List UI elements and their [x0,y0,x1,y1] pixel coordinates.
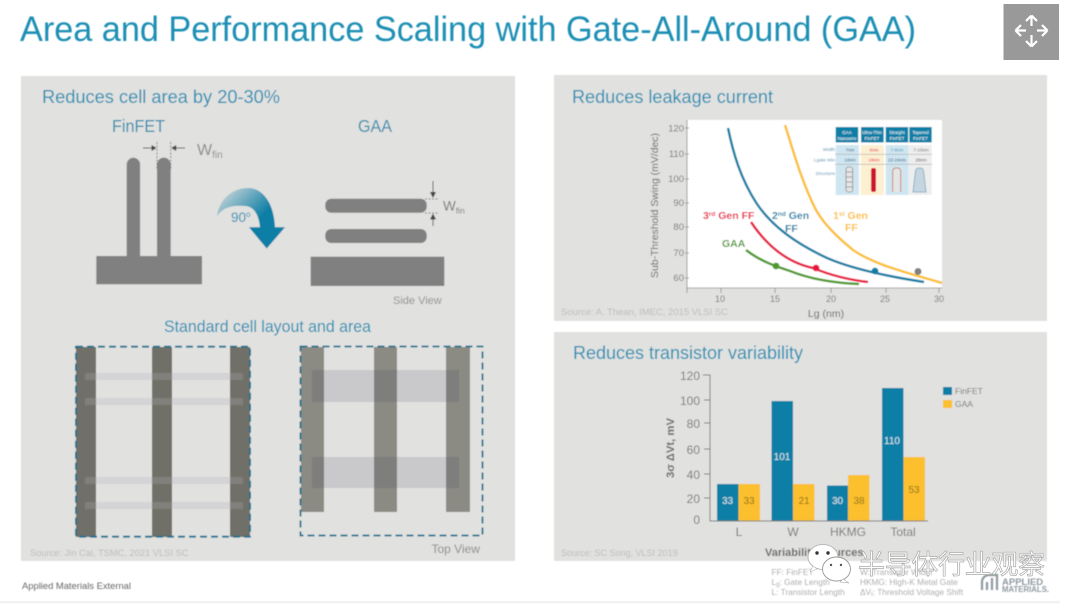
line chart: sub-threshold swing: 15 [770,294,780,304]
legend: FinFET [955,386,983,396]
logo: Applied Materials: APPLIED [1002,577,1043,588]
bar chart: 3 sigma delta Vt: W [787,525,799,539]
bar chart: 3 sigma delta Vt: 40 [687,468,700,482]
axis title: Lg: Lg (nm) [808,308,844,320]
curve label: 3rd Gen FF: 3 [703,210,709,222]
source: left panel: Source: Jin Cai, TSMC, 2021 VLSI SC [30,548,189,558]
line chart: sub-threshold swing: 20 [826,294,836,304]
axis title: delta Vt: 3σ ΔVt, mV [665,417,677,478]
glossary notes [772,567,964,598]
inset table: device structures: FinFET [890,136,905,141]
inset table: device structures: Tapered [912,130,929,135]
caption: side view: Side View [393,295,442,307]
line chart: sub-threshold swing: 10 [715,294,725,304]
footer rule [0,602,1060,603]
diagram: FinFET side view: fin [212,150,223,161]
legend [943,386,983,409]
diagram: GAA side view: fin [456,206,465,216]
line chart: sub-threshold swing: 100 [668,174,684,185]
glossary notes: L [772,577,776,587]
inset table: device structures: FinFET [913,136,928,141]
inset table: device structures: 22-24nm [888,158,906,162]
source: leakage: Source: A. Thean, IMEC, 2015 VLSI SC [561,307,729,317]
axis title: swing: Sub-Threshold Swing (mV/dec) [650,133,661,278]
glossary notes: HKMG: High-K Metal Gate [860,577,958,587]
watermark: text: 半导体行业观察 [858,543,1045,582]
inset table: device structures [814,127,932,195]
glossary notes: : Threshold Voltage Shift [873,587,964,597]
legend: GAA [955,399,973,409]
title: Area and Performance Scaling with Gate-All-Around (GAA) [20,9,916,49]
curve: 2nd Gen FF [728,128,924,282]
inset table: device structures: 6nm [870,148,879,152]
bar chart: 3 sigma delta Vt: 120 [680,369,700,383]
footer: classification: Applied Materials External [22,581,131,591]
curve label: 1st Gen FF: st [839,211,845,218]
source: variability: Source: SC Song, VLSI 2019 [561,548,678,558]
heading: leakage: Reduces leakage current [572,87,773,107]
line chart: sub-threshold swing: 90 [673,198,684,209]
diagram: GAA side view [311,181,465,286]
glossary notes: g [776,582,779,588]
glossary notes: L: Transistor Length [772,587,845,597]
curve label: 1st Gen FF: FF [845,222,858,234]
diagram: FinFET side view [96,142,223,284]
bar chart: 3 sigma delta Vt: 0 [693,513,700,527]
glossary notes: W: Transistor Width [860,567,933,577]
inset table: device structures: 7nm [846,148,855,152]
bar chart: 3 sigma delta Vt: 53 [908,485,920,496]
curve label: 2nd Gen FF: nd [778,211,786,218]
bar chart: 3 sigma delta Vt: 21 [798,496,810,507]
curve: GAA [746,250,859,284]
curve label: 1st Gen FF: Gen [845,210,868,222]
arrow: 90 degree rotation [217,188,285,248]
heading: cell area: Reduces cell area by 20-30% [42,87,280,107]
glossary notes: t [871,592,873,598]
label: FinFET: FinFET [112,116,165,136]
icon: move control [1004,4,1059,60]
inset table: device structures: 10nm [844,158,856,162]
bar chart: 3 sigma delta Vt: 80 [687,417,700,431]
bar chart: 3 sigma delta Vt: 33 [743,496,755,507]
bar chart: 3 sigma delta Vt: 30 [832,496,843,507]
inset table: device structures: Structure [816,171,835,177]
bar chart: 3 sigma delta Vt: Total [890,525,916,539]
heading: standard cell layout: Standard cell layout and area [164,317,372,336]
curve label: 3rd Gen FF: rd [709,211,715,218]
line chart: sub-threshold swing: 120 [668,124,684,134]
heading: variability: Reduces transistor variability [573,343,803,363]
line chart: sub-threshold swing: 60 [673,273,684,284]
bar chart: 3 sigma delta Vt: 33 [722,496,733,507]
bar chart: 3 sigma delta Vt: HKMG [830,525,866,539]
inset table: device structures: 7-8nm [891,148,904,152]
logo: Applied Materials: MATERIALS. [1002,585,1049,594]
line chart: sub-threshold swing: 80 [673,222,684,233]
data points [773,263,922,275]
arrow: 90 degree rotation: 90 [231,210,246,225]
inset table: device structures: Nanowire [837,136,857,141]
glossary notes: FF: FinFET [772,567,813,577]
bar chart: 3 sigma delta Vt: L [736,525,743,539]
caption: top view: Top View [432,542,480,556]
line chart: sub-threshold swing: 30 [934,294,944,304]
inset table: device structures: Ultra-Thin [862,130,882,135]
panel: leakage current [554,75,1047,321]
line chart: sub-threshold swing: 70 [673,248,684,259]
arrow: 90 degree rotation: o [246,210,251,219]
curve label: 1st Gen FF: 1 [833,210,839,222]
diagram: FinFET cell layout [76,347,250,537]
diagram: GAA cell layout [300,346,482,536]
curve: 3rd Gen FF [751,222,868,282]
bar chart: 3 sigma delta Vt: 20 [687,492,700,506]
curve label: 2nd Gen FF: 2 [772,210,778,222]
diagram: GAA side view: W [443,198,456,214]
inset table: device structures: 28nm [915,158,927,162]
axis title: variability sources: Variability Sources [765,547,863,559]
inset table: device structures: FinFET [865,136,880,141]
inset table: device structures: Straight [889,130,906,135]
logo: Applied Materials [982,575,1049,594]
inset table: device structures: 18nm [868,158,880,162]
inset table: device structures: Width [823,147,835,153]
glossary notes: ΔV [860,587,871,597]
bar chart: 3 sigma delta Vt: 38 [853,496,865,507]
label: GAA: GAA [358,116,392,136]
inset table: device structures: GAA [842,130,852,135]
curve label: GAA: GAA [722,238,746,250]
bar chart: 3 sigma delta Vt: 101 [774,452,791,463]
bar chart: 3 sigma delta Vt: 100 [680,394,700,408]
curve label: 2nd Gen FF: FF [785,223,798,235]
curve label: 3rd Gen FF: Gen FF [715,210,755,222]
watermark: WeChat icon [808,544,850,583]
panel: transistor variability [554,332,1047,561]
inset table: device structures: Lgate Min [814,158,835,164]
bar chart: 3 sigma delta Vt: 60 [687,443,700,457]
curve: 1st Gen FF [785,125,942,283]
diagram: FinFET side view: W [197,142,212,159]
curve label: 2nd Gen FF: Gen [786,210,809,222]
line chart: sub-threshold swing: 110 [669,149,684,160]
line chart: sub-threshold swing: 25 [880,294,890,304]
bar chart: 3 sigma delta Vt [665,369,983,559]
glossary notes: : Gate Length [779,577,830,587]
bar chart: 3 sigma delta Vt: 110 [884,436,900,447]
panel: cell area [21,76,515,561]
inset table: device structures: 7-10nm [913,148,929,152]
line chart: sub-threshold swing [650,120,944,320]
